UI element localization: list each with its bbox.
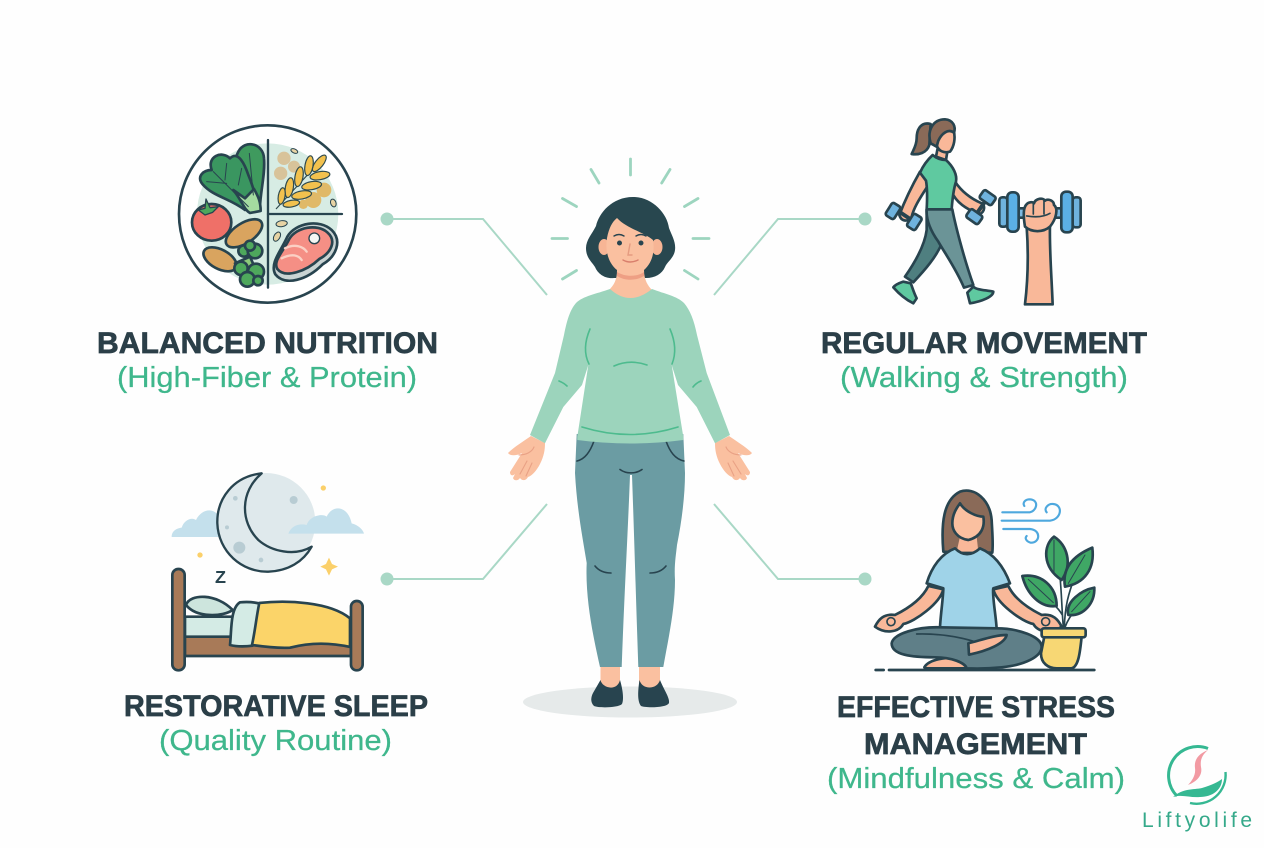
breath lines [1002, 499, 1060, 543]
trouser creases [577, 441, 684, 573]
ground shadow [523, 686, 737, 718]
grains [274, 148, 337, 209]
heading: balanced nutrition: BALANCED NUTRITION [97, 327, 438, 360]
plant [1022, 537, 1094, 627]
clouds [172, 510, 220, 537]
sleep letter: Z [215, 567, 226, 587]
hands [508, 436, 752, 480]
subheading: quality routine: (Quality Routine) [159, 725, 392, 757]
plate dividers [268, 140, 342, 288]
broccoli [234, 241, 264, 287]
icon: walker and dumbbell [885, 119, 1081, 304]
heading: restorative sleep: RESTORATIVE SLEEP [124, 690, 428, 723]
ears [598, 239, 662, 255]
crescent outline [217, 473, 312, 572]
right arm [993, 586, 1062, 631]
hair [943, 491, 993, 553]
pot [1041, 637, 1082, 668]
heading: regular movement: REGULAR MOVEMENT [821, 327, 1147, 360]
legs and shoes [591, 665, 669, 707]
subheading: mindfulness and calm: (Mindfulness & Calm) [827, 763, 1125, 795]
potatoes [200, 214, 267, 276]
crossed legs [924, 658, 967, 668]
central figure: woman with radiating lines [508, 159, 752, 718]
radiating lines [552, 159, 709, 279]
shirt [920, 155, 956, 209]
back arm and dumbbell [899, 172, 930, 221]
fist [1024, 199, 1056, 231]
sweater creases [559, 329, 701, 434]
icon: plate [179, 125, 356, 303]
arm and dumbbell [1025, 225, 1053, 304]
facial features [614, 234, 646, 262]
hair top [929, 119, 955, 147]
hair [586, 197, 675, 278]
stars [197, 485, 338, 576]
shoes [893, 282, 917, 303]
salmon [272, 220, 337, 281]
shirt [927, 548, 1010, 630]
tomato [192, 199, 231, 241]
face [606, 218, 654, 274]
neck [609, 270, 652, 298]
logo: Liftyolife [1142, 747, 1252, 832]
heading: effective stress management: EFFECTIVE STRESS [837, 691, 1115, 724]
wheat [276, 153, 331, 209]
legs [905, 210, 943, 282]
icon: moon and bed [172, 473, 364, 670]
neck and face [957, 537, 978, 552]
cloud over moon [288, 508, 364, 534]
neck and face [936, 145, 947, 160]
subheading: walking and strength: (Walking & Strength) [840, 362, 1128, 394]
logo: Liftyolife: Liftyolife [1142, 809, 1252, 832]
moon craters [225, 496, 298, 562]
left arm [875, 586, 943, 631]
leafy greens [200, 144, 264, 213]
heading: effective stress management: MANAGEMENT [864, 728, 1087, 761]
connector lines [380, 212, 872, 586]
trousers [575, 434, 685, 667]
subheading: high-fiber and protein: (High-Fiber & Protein) [117, 362, 417, 394]
moon [217, 473, 315, 572]
sweater [530, 289, 730, 444]
ponytail [912, 124, 931, 154]
ground line [876, 666, 1094, 674]
icon: meditating woman with plant [875, 491, 1094, 670]
front arm and dumbbell [952, 182, 984, 214]
bed [172, 569, 363, 670]
